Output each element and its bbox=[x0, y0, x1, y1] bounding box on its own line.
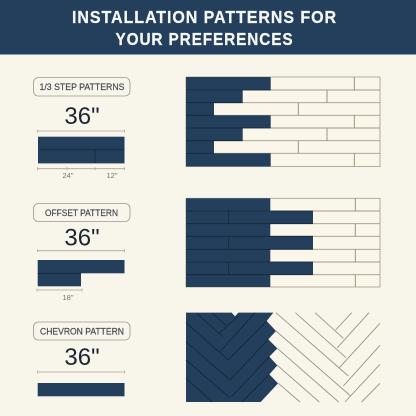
panel: 1/3 step pattern spec: 12" bbox=[106, 171, 118, 180]
panel: offset pattern spec: 36" bbox=[64, 225, 100, 252]
panel: 1/3 step layout diagram bbox=[186, 77, 380, 166]
panel: offset pattern spec: 18" bbox=[62, 293, 74, 302]
panel: chevron pattern spec: CHEVRON PATTERN bbox=[40, 326, 124, 336]
header banner: INSTALLATION PATTERNS FOR bbox=[72, 7, 337, 27]
panel: 1/3 step pattern spec: 24" bbox=[62, 171, 74, 180]
panel: offset pattern spec: OFFSET PATTERN bbox=[45, 208, 118, 218]
header banner bbox=[0, 0, 416, 54]
panel: offset pattern spec bbox=[34, 204, 130, 302]
header banner: YOUR PREFERENCES bbox=[116, 29, 294, 49]
panel: 1/3 step pattern spec: 36" bbox=[64, 103, 100, 130]
panel: chevron layout diagram, navy side bbox=[186, 313, 278, 402]
panel: chevron layout diagram, cream side bbox=[276, 313, 380, 402]
panel: 1/3 step pattern spec: 1/3 STEP PATTERNS bbox=[40, 82, 124, 92]
panel: 1/3 step pattern spec bbox=[34, 78, 130, 180]
panel: chevron pattern spec bbox=[34, 322, 130, 396]
panel: offset layout diagram bbox=[186, 198, 380, 287]
panel: chevron pattern spec: 36" bbox=[64, 344, 100, 371]
